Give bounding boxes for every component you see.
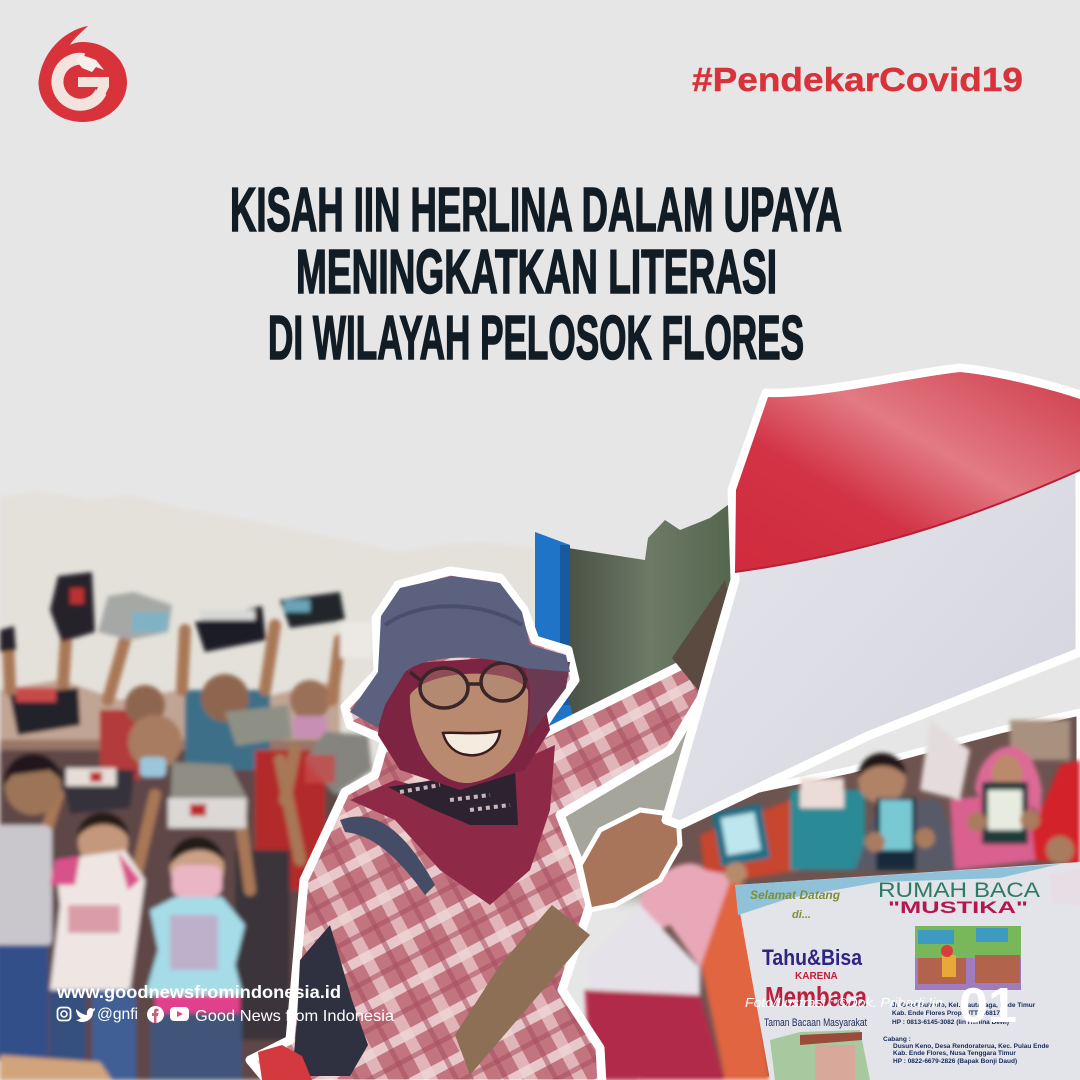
hijab xyxy=(378,655,550,790)
banner: HP : 0813-6145-3082 (Iin Herlina Dewi) xyxy=(892,1019,1009,1026)
title xyxy=(230,176,842,373)
banner: Cabang : xyxy=(883,1036,911,1043)
banner: Tahu&Bisa xyxy=(762,945,863,970)
floor table xyxy=(0,1055,112,1080)
fist xyxy=(580,810,680,910)
icon: youtube xyxy=(170,1007,189,1021)
dark trousers and backpack strap xyxy=(292,925,368,1076)
hat xyxy=(350,576,570,728)
banner: RUMAH BACA xyxy=(878,879,1040,902)
blue shirt kid xyxy=(170,841,224,895)
banner: KARENA xyxy=(795,971,838,982)
flag xyxy=(666,368,1080,825)
handle: @gnfi xyxy=(97,1006,138,1023)
banner: Dusun Keno, Desa Rendoraterua, Kec. Pulau Ende xyxy=(893,1043,1049,1050)
photo: children holding packages xyxy=(0,491,535,1080)
icon: twitter xyxy=(76,1008,95,1022)
glasses xyxy=(410,663,530,708)
hashtag: #PendekarCovid19 xyxy=(692,61,1023,98)
page number: 01 xyxy=(959,979,1017,1033)
banner: Membaca xyxy=(765,981,867,1012)
woman xyxy=(250,571,732,1080)
forearm sleeve xyxy=(455,905,590,1075)
left kid xyxy=(5,759,61,815)
raised sleeve xyxy=(672,580,732,695)
photo: children with banner, lower right xyxy=(585,712,1080,1080)
brim shade xyxy=(524,662,570,738)
banner: di... xyxy=(792,909,811,921)
crowd base xyxy=(0,572,374,1080)
banner: Kab. Ende Flores Prop. NTT (86817) xyxy=(892,1010,1002,1017)
face xyxy=(410,674,528,783)
scarf xyxy=(350,745,555,905)
back heads xyxy=(125,685,165,725)
pink shirt kid xyxy=(78,817,128,867)
photo: fence and blue post xyxy=(535,502,732,900)
page name: Good News from Indonesia xyxy=(195,1008,394,1025)
logo xyxy=(38,26,127,122)
children xyxy=(585,720,1080,1080)
banner: Jl. Gatot Subroto, Kel. Mautapaga, Ende Timur xyxy=(892,1002,1036,1009)
website: www.goodnewsfromindonesia.id xyxy=(56,982,341,1002)
banner: Kab. Ende Flores, Nusa Tenggara Timur xyxy=(893,1050,1016,1057)
icon: instagram xyxy=(58,1008,70,1020)
water bottle xyxy=(258,1045,312,1080)
pink-hijab child left xyxy=(610,863,732,968)
raised arms xyxy=(8,625,340,890)
orange dress child xyxy=(700,870,770,1080)
title: MENINGKATKAN LITERASI xyxy=(296,238,777,307)
banner xyxy=(735,862,1080,1080)
packages xyxy=(0,572,374,830)
photo credit: Foto/Ilustrasi : ©Dok. Pribadi Iin xyxy=(745,995,943,1010)
source and social text xyxy=(56,982,394,1025)
wall xyxy=(0,491,535,1080)
banner: HP : 0822-6679-2826 (Bapak Bonji Daud) xyxy=(893,1058,1017,1065)
banner: Selamat Datang xyxy=(750,888,841,902)
smile xyxy=(443,731,500,755)
silhouette and shirt xyxy=(250,571,712,1080)
banner: "MUSTIKA" xyxy=(888,898,1028,917)
icon: facebook xyxy=(147,1006,164,1023)
banner: Taman Bacaan Masyarakat xyxy=(764,1017,867,1029)
